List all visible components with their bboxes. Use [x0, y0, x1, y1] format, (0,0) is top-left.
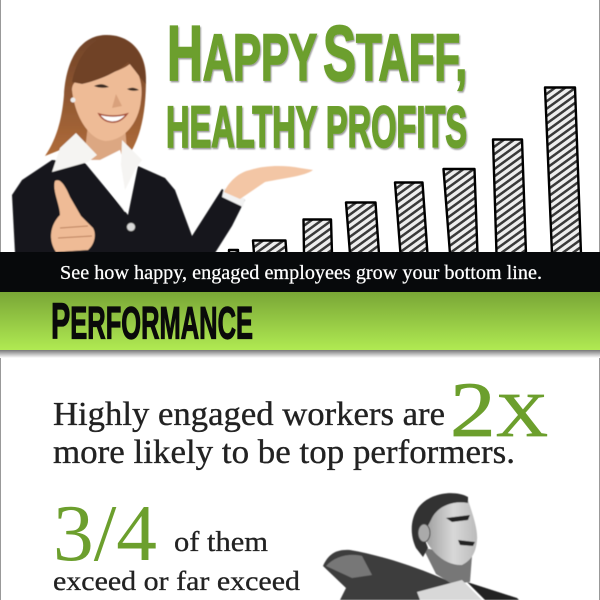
collar	[52, 133, 142, 190]
eye and mouth	[446, 515, 475, 546]
subtitle strip	[0, 252, 600, 292]
photo: smiling businesswoman presenting the chart	[12, 35, 313, 253]
big number 2X: 2X	[450, 366, 548, 453]
bar chart: rising hand-drawn hatched bars	[229, 88, 581, 254]
cape highlight	[326, 555, 372, 578]
suit	[467, 582, 519, 600]
shirt cuff	[222, 188, 245, 207]
stat: highly engaged workers 2X	[53, 366, 548, 471]
stat text line 2: more likely to be top performers.	[53, 434, 515, 471]
title line 1: HAPPY STAFF,	[167, 9, 467, 97]
finger creases	[58, 226, 92, 238]
subtitle text: See how happy, engaged employees grow your bottom line.	[60, 262, 542, 284]
of them: of them	[174, 527, 268, 558]
big fraction 3/4: 3/4	[53, 490, 157, 578]
fringe	[72, 37, 146, 84]
smile	[99, 114, 127, 122]
title: Happy Staff, Healthy Profits	[166, 9, 467, 160]
stat text line 1: Highly engaged workers are	[53, 396, 445, 433]
section heading text: PERFORMANCE	[51, 292, 253, 350]
stat: three quarters exceed	[53, 490, 301, 596]
neck	[85, 125, 128, 190]
neck	[423, 548, 472, 584]
photo: man in suit with cape	[323, 493, 519, 600]
thumbs-up hand	[51, 180, 95, 252]
cape	[323, 550, 470, 600]
hair	[412, 493, 468, 557]
head	[418, 498, 477, 565]
exceed or far exceed: exceed or far exceed	[53, 566, 301, 596]
nose	[112, 94, 122, 108]
earring	[70, 98, 76, 102]
eyes	[94, 84, 139, 91]
shirt	[417, 580, 482, 600]
shirt	[88, 150, 127, 212]
jacket button	[126, 222, 136, 232]
hair back	[45, 35, 146, 156]
ear	[418, 524, 430, 542]
section header: Performance	[0, 292, 600, 358]
open hand	[224, 166, 313, 199]
face	[72, 62, 142, 141]
jacket	[12, 160, 245, 253]
